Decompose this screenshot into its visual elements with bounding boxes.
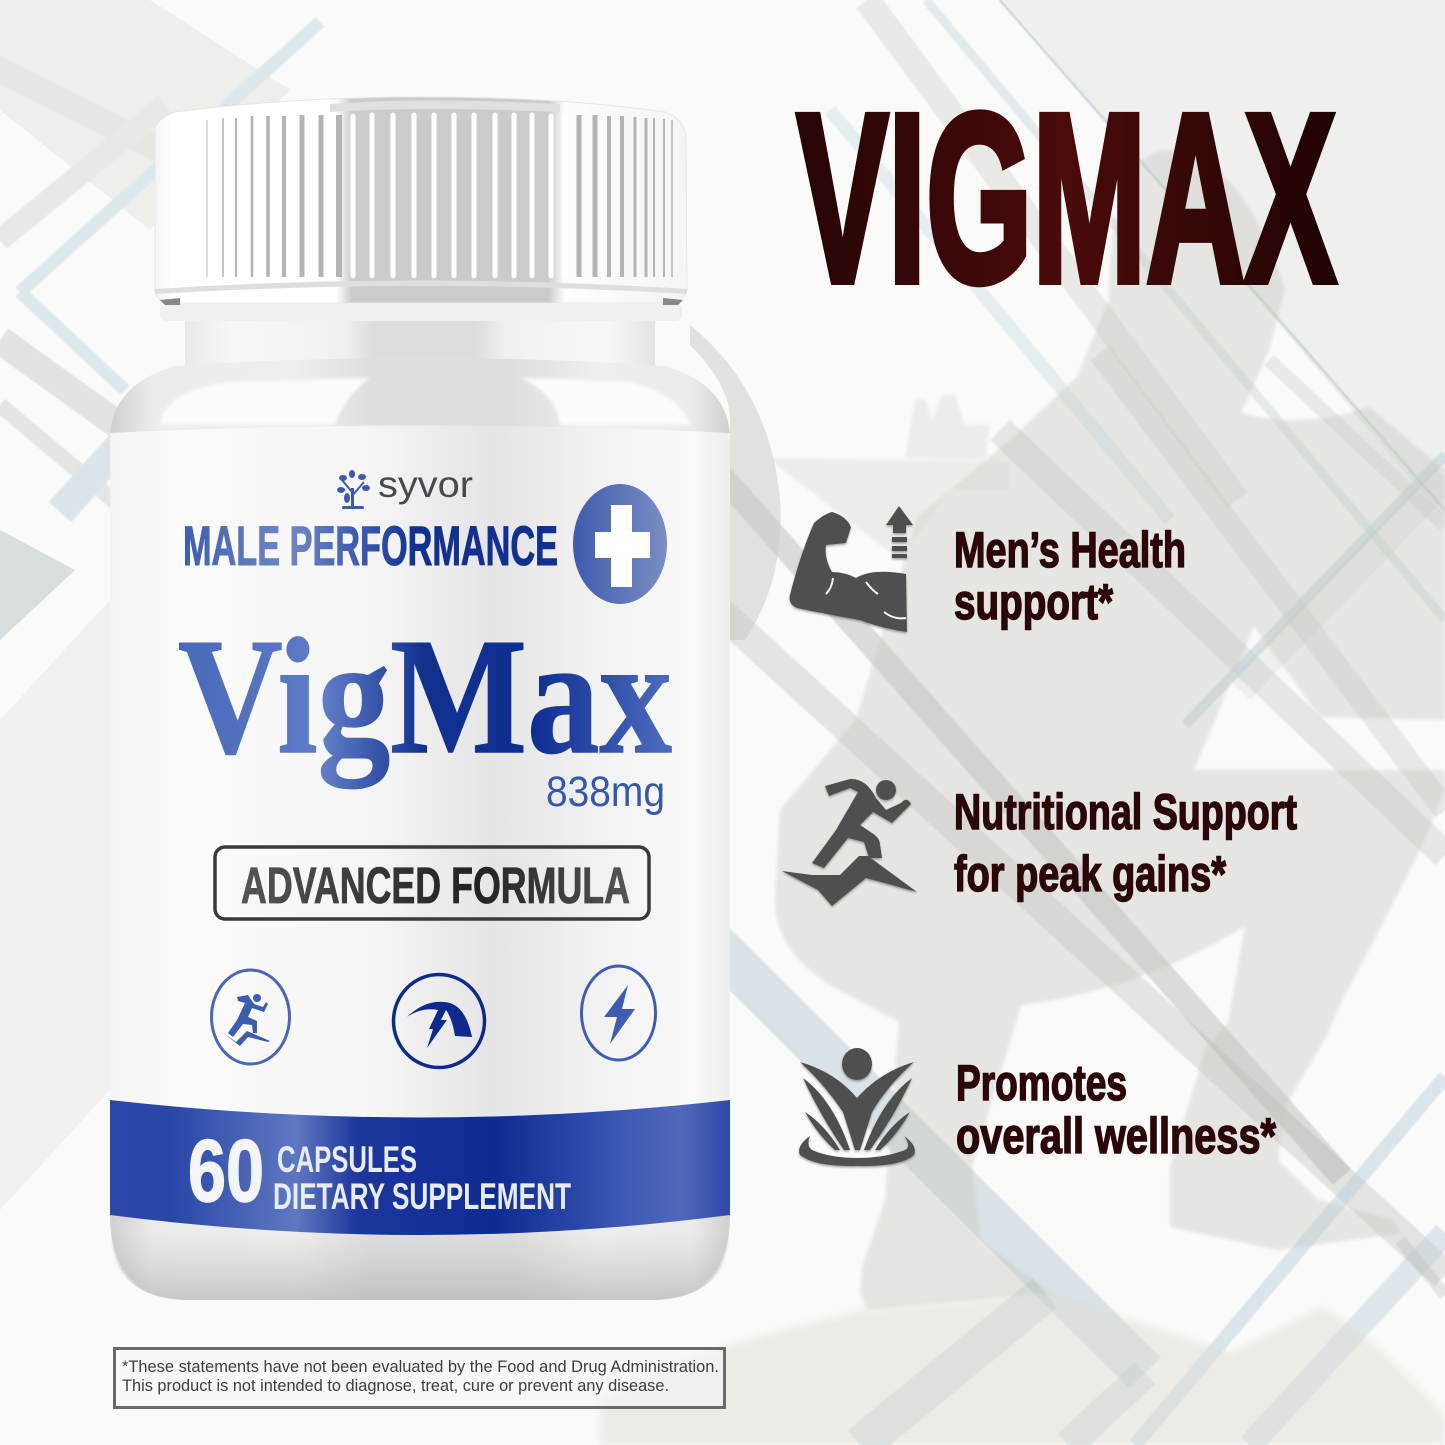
icon: flexed arm with arrow: [790, 506, 913, 632]
heading line two: overall wellness*: [956, 1108, 1276, 1164]
heading line one: Men’s Health: [954, 522, 1186, 578]
advanced formula badge: [215, 847, 649, 919]
icon: wellness figure: [799, 1048, 915, 1166]
cap ribs white: [353, 115, 564, 276]
icon: runner: [782, 779, 917, 906]
feature text: mens health: [954, 522, 1186, 630]
icon: tree: [337, 470, 370, 509]
shoulder highlights: [160, 378, 690, 425]
blue band: [110, 1100, 730, 1235]
dosage: 838mg: [546, 768, 665, 816]
background: athlete silhouette: [600, 150, 1445, 1445]
brand logo: [337, 464, 473, 509]
product line heading: MALE PERFORMANCE: [183, 514, 558, 577]
background: floor: [600, 1293, 1445, 1445]
icon: plus badge: [573, 484, 667, 604]
bottle cap: [155, 97, 687, 321]
background: barbell and hand: [770, 395, 1010, 560]
heading line one: Nutritional Support: [954, 784, 1297, 840]
feature text: wellness: [956, 1055, 1276, 1164]
dietary supplement line: DIETARY SUPPLEMENT: [273, 1176, 571, 1217]
brand name: syvor: [378, 464, 473, 505]
capsules line: CAPSULES: [277, 1139, 417, 1180]
disclaimer box: [114, 1348, 724, 1408]
product name: VigMax: [178, 604, 672, 789]
bottle body: [110, 358, 730, 1300]
feature text: nutritional support: [954, 784, 1297, 902]
heading line one: Promotes: [956, 1055, 1127, 1111]
disclaimer line two: This product is not intended to diagnose, treat, cure or prevent any disease.: [122, 1377, 669, 1395]
bottle label: [110, 426, 730, 1232]
cap ribs grey: [207, 115, 672, 277]
bottle neck: [185, 300, 655, 380]
heading line two: for peak gains*: [954, 846, 1226, 902]
icon: bolt badge: [582, 966, 656, 1060]
disclaimer line one: *These statements have not been evaluated by the Food and Drug Administration.: [122, 1358, 719, 1376]
heading line two: support*: [954, 574, 1113, 630]
product bottle: [110, 97, 730, 1300]
bottom shading: [110, 1230, 730, 1300]
background: arc behind bottle: [690, 325, 781, 640]
capsule count: 60: [188, 1121, 264, 1220]
icon: running badge: [212, 970, 290, 1064]
icon: arc and bolt badge: [394, 974, 484, 1068]
advanced formula badge: ADVANCED FORMULA: [241, 857, 630, 914]
